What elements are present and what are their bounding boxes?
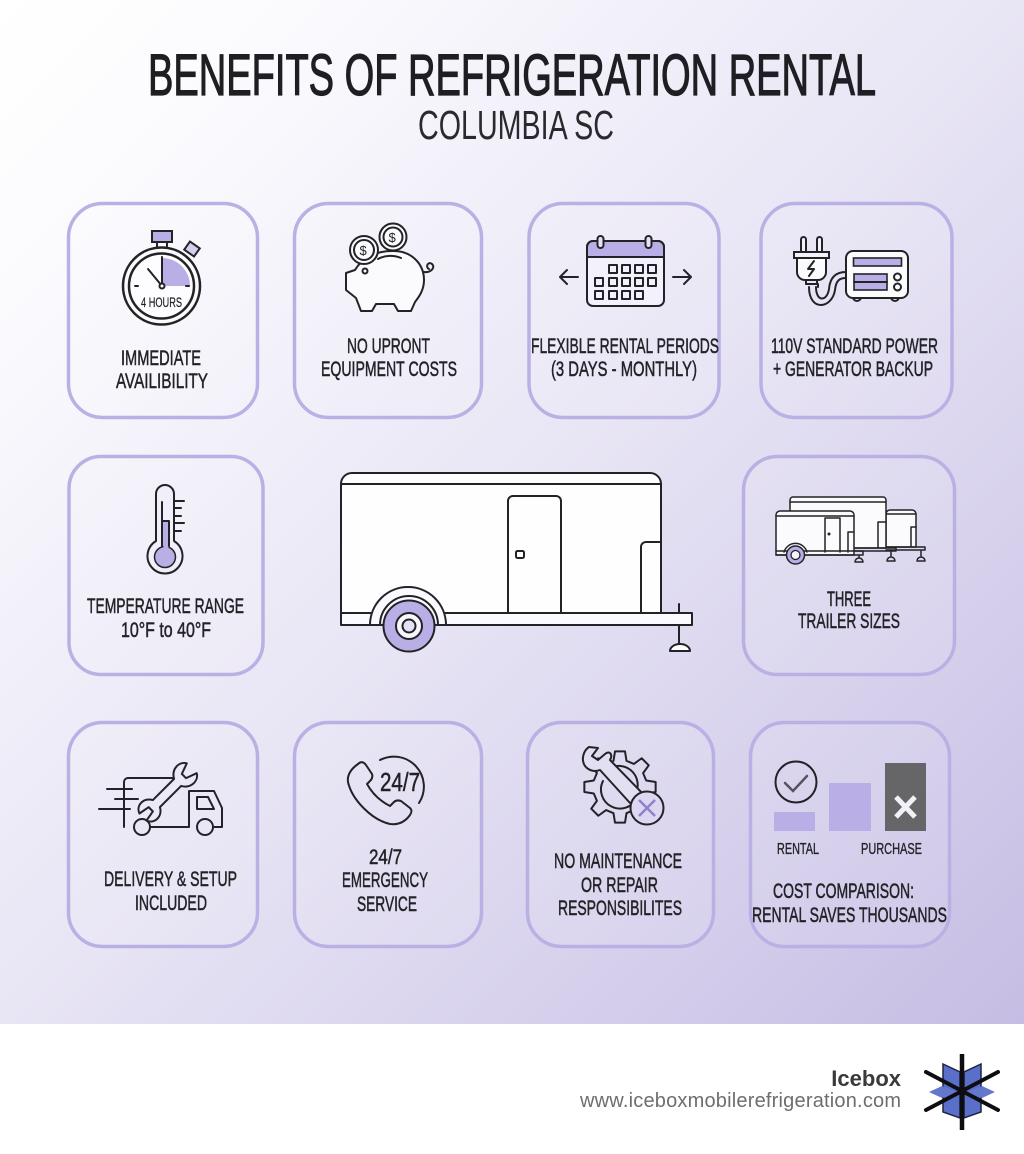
- icon: piggy bank with coins: $: [360, 243, 368, 258]
- footer panel: [0, 1024, 1024, 1154]
- label: no upront equipment costs: NO UPRONT: [347, 335, 430, 358]
- bar chart: rental vs purchase: [774, 762, 926, 858]
- label: delivery and setup: INCLUDED: [135, 892, 207, 915]
- label: temperature range: 10°F to 40°F: [121, 619, 211, 642]
- label: no maintenance: RESPONSIBILITES: [558, 897, 682, 920]
- panel: temperature range: [69, 456, 263, 674]
- panel: immediate availability: [68, 204, 258, 418]
- label: 24/7 emergency service: 24/7: [369, 846, 402, 869]
- panel: no upfront costs: [294, 204, 482, 418]
- icon: stopwatch: 4 HOURS: [141, 294, 182, 310]
- label: three trailer sizes: TRAILER SIZES: [798, 610, 900, 633]
- panel: 24/7 emergency service: [294, 722, 482, 946]
- label: no upront equipment costs: EQUIPMENT COSTS: [321, 358, 457, 381]
- panel: flexible rental periods: [529, 204, 719, 418]
- label: 110v standard power: 110V STANDARD POWER: [771, 335, 938, 358]
- icon: thermometer: [148, 485, 184, 574]
- icon: plug and generator: [794, 237, 908, 305]
- panel: 110v power and generator: [761, 204, 952, 418]
- icon: snowflake logo: [926, 1054, 998, 1130]
- subtitle: COLUMBIA SC: [418, 102, 614, 148]
- icon: piggy bank with coins: $: [388, 230, 396, 245]
- icon: gear wrench with cross: [583, 747, 664, 824]
- label: three trailer sizes: THREE: [827, 588, 871, 611]
- label: 110v standard power: + GENERATOR BACKUP: [773, 358, 933, 381]
- label: 24/7 emergency service: EMERGENCY: [342, 869, 428, 892]
- label: 24/7 emergency service: SERVICE: [357, 893, 417, 916]
- icon: piggy bank with coins: [346, 224, 433, 311]
- brand name: Icebox: [831, 1066, 902, 1091]
- label: flexible rental periods: FLEXIBLE RENTAL PERIODS: [531, 335, 719, 358]
- icon: phone 24/7: [348, 757, 424, 824]
- icon: stopwatch: [123, 231, 200, 324]
- label: flexible rental periods: (3 DAYS - MONTHLY): [551, 358, 697, 381]
- bar chart: rental vs purchase: RENTAL: [777, 841, 819, 858]
- panel: delivery and setup: [68, 722, 258, 946]
- label: no maintenance: NO MAINTENANCE: [554, 850, 682, 873]
- icon: phone 24/7: 24/7: [380, 767, 420, 797]
- label: cost comparison: COST COMPARISON:: [773, 880, 914, 903]
- panel: no maintenance: [528, 722, 714, 946]
- bar chart: rental vs purchase: PURCHASE: [861, 841, 922, 858]
- icon: calendar with arrows: [560, 236, 691, 306]
- panel: three trailer sizes: [744, 456, 954, 674]
- label: no maintenance: OR REPAIR: [581, 874, 658, 897]
- label: temperature range: TEMPERATURE RANGE: [87, 595, 244, 618]
- icon: three trailers: [776, 497, 925, 564]
- label: delivery and setup: DELIVERY & SETUP: [104, 868, 237, 891]
- website url: www.iceboxmobilerefrigeration.com: [579, 1090, 901, 1112]
- panel: cost comparison: [750, 722, 950, 946]
- label: immediate availability: AVAILIBILITY: [116, 370, 208, 393]
- icon: delivery truck with wrench: [99, 760, 222, 835]
- label: immediate availability: IMMEDIATE: [121, 347, 201, 370]
- illustration: refrigerated trailer: [341, 473, 692, 652]
